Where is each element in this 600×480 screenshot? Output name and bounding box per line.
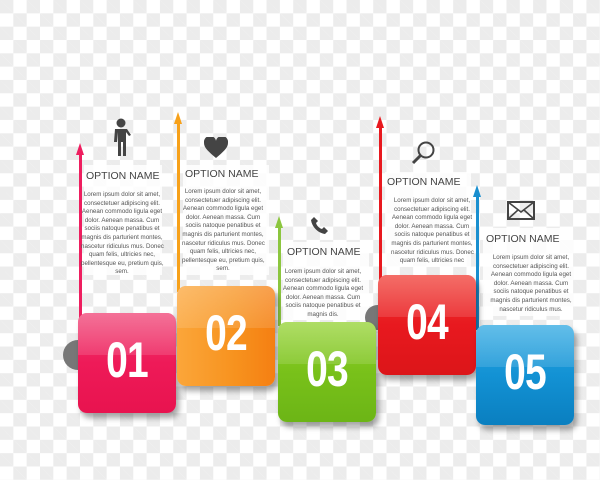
text 2: sociis natoque penatibus et [186, 222, 260, 229]
text 2: quam felis, ultricies nec, [190, 248, 256, 255]
text 3: Aenean commodo ligula eget [283, 285, 363, 292]
text 1: Lorem ipsum dolor sit amet, [84, 191, 160, 198]
text 2: Lorem ipsum dolor sit amet, [185, 188, 261, 195]
title 4: OPTION NAME [387, 176, 461, 188]
panel backgrounds [84, 165, 573, 320]
text 4: magnis dis parturient montes, [391, 240, 473, 247]
text 2: Aenean commodo ligula eget [183, 205, 263, 212]
text 1: magnis dis parturient montes, [81, 234, 163, 241]
text 2: pellentesque eu, pretium quis, [182, 257, 265, 264]
text 4: Lorem ipsum dolor sit amet, [394, 197, 470, 204]
text 2: consectetuer adipiscing elit. [185, 197, 261, 204]
title 5: OPTION NAME [486, 233, 560, 245]
box 05: 05 [504, 344, 546, 400]
arrow: green [278, 226, 281, 326]
text 5: Aenean commodo ligula eget [491, 271, 571, 278]
title 1: OPTION NAME [86, 170, 160, 182]
text 3: dolor. Aenean massa. Cum [286, 294, 360, 301]
text 3: Lorem ipsum dolor sit amet, [285, 268, 361, 275]
text 4: consectetuer adipiscing elit. [394, 206, 470, 213]
text 5: nascetur ridiculus mus. [499, 306, 563, 313]
box 04 [378, 275, 476, 375]
arrow: red [379, 126, 382, 281]
text 3 [283, 268, 364, 318]
text 1: Aenean commodo ligula eget [82, 208, 162, 215]
icon: person [114, 118, 131, 156]
text 1: dolor. Aenean massa. Cum [85, 217, 159, 224]
title 2: OPTION NAME [185, 168, 259, 180]
icon: heart [204, 137, 228, 158]
box 05 [476, 325, 574, 425]
icon: phone [311, 217, 328, 234]
arrow: blue [476, 195, 479, 330]
text 5: sociis natoque penatibus et [494, 288, 568, 295]
text 4: dolor. Aenean massa. Cum [395, 223, 469, 230]
box 02: 02 [205, 305, 247, 361]
text 5 [490, 254, 572, 313]
text 3: magnis dis. [307, 311, 339, 318]
shadows [63, 305, 378, 370]
text 5: consectetuer adipiscing elit. [493, 263, 569, 270]
arrow: orange [177, 122, 180, 292]
arrow: pink [79, 153, 82, 318]
text 4 [391, 197, 474, 264]
text 5: magnis dis parturient montes, [490, 297, 572, 304]
box 01: 01 [106, 332, 148, 388]
text 1: pellentesque eu, pretium quis, [81, 260, 164, 267]
text 5: dolor. Aenean massa. Cum [494, 280, 568, 287]
title 3: OPTION NAME [287, 246, 361, 258]
text 2: magnis dis parturient montes, [182, 231, 264, 238]
text 2 [182, 188, 265, 272]
text 1 [81, 191, 164, 275]
text 2: nascetur ridiculus mus. Donec [182, 240, 265, 247]
text 2: sem. [216, 265, 230, 272]
text 3: consectetuer adipiscing elit. [285, 277, 361, 284]
box 03 [278, 322, 376, 422]
text 1: quam felis, ultricies nec, [89, 251, 155, 258]
text 4: quam felis, ultricies nec [400, 257, 464, 264]
text 4: nascetur ridiculus mus. Donec [391, 249, 474, 256]
text 5: Lorem ipsum dolor sit amet, [493, 254, 569, 261]
box 01 [78, 313, 176, 413]
icon: envelope [507, 201, 535, 220]
text 4: sociis natoque penatibus et [394, 231, 470, 238]
icon: magnifier [412, 142, 434, 164]
box 04: 04 [406, 294, 448, 350]
text 1: consectetuer adipiscing elit. [84, 200, 160, 207]
text 3: sociis natoque penatibus et [286, 302, 360, 309]
box 03: 03 [306, 341, 348, 397]
text 1: sociis natoque penatibus et [84, 225, 160, 232]
text 1: nascetur ridiculus mus. Donec [81, 243, 164, 250]
box 02 [177, 286, 275, 386]
text 4: Aenean commodo ligula eget [392, 214, 472, 221]
text 2: dolor. Aenean massa. Cum [186, 214, 260, 221]
text 1: sem. [115, 268, 129, 275]
